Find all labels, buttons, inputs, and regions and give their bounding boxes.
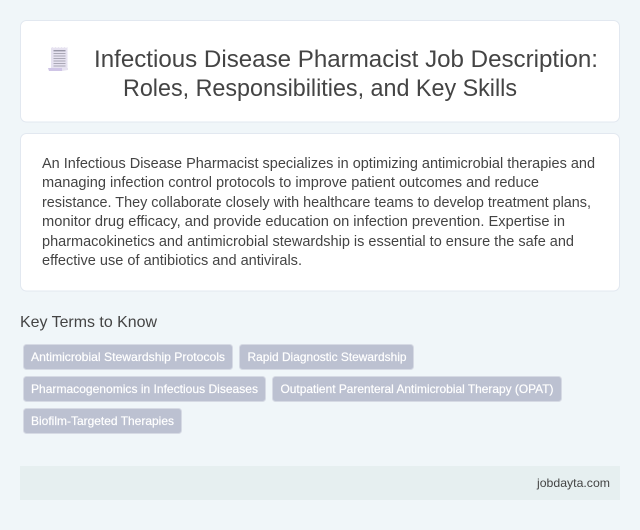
- tag: pharmacogenomics: [24, 376, 266, 402]
- tag: OPAT: Outpatient Parenteral Antimicrobial Therapy (OPAT): [280, 382, 554, 396]
- tag: pharmacogenomics: Pharmacogenomics in Infectious Diseases: [31, 382, 258, 396]
- description text: monitor drug efficacy, and provide education on infection prevention. Expertise in: [42, 214, 565, 230]
- tag: rapid diagnostic stewardship: Rapid Diagnostic Stewardship: [248, 350, 407, 364]
- description text: effective use of antibiotics and antivirals.: [42, 253, 302, 269]
- tag: biofilm: Biofilm-Targeted Therapies: [31, 414, 174, 428]
- footer source: jobdayta.com: [536, 476, 610, 490]
- title: Roles, Responsibilities, and Key Skills: [123, 75, 517, 102]
- tag: OPAT: [272, 376, 562, 402]
- title: [94, 46, 598, 102]
- tags: key terms: [24, 344, 562, 434]
- footer: [20, 466, 620, 500]
- description text: pharmacokinetics and antimicrobial stewardship is essential to ensure the safe and: [42, 234, 574, 250]
- tag: rapid diagnostic stewardship: [240, 344, 414, 370]
- description text: [42, 156, 595, 269]
- tag: biofilm: [24, 408, 182, 434]
- heading: key terms: Key Terms to Know: [20, 314, 157, 331]
- description text: resistance. They collaborate closely with healthcare teams to develop treatment plans,: [42, 195, 591, 211]
- icon: document scroll: [48, 47, 68, 71]
- panel: description: [20, 134, 620, 291]
- description text: An Infectious Disease Pharmacist specializes in optimizing antimicrobial therapies and: [42, 156, 595, 172]
- tag: antimicrobial stewardship protocols: [24, 344, 232, 370]
- description text: managing infection control protocols to improve patient outcomes and reduce: [42, 175, 539, 191]
- tag: antimicrobial stewardship protocols: Antimicrobial Stewardship Protocols: [31, 350, 225, 364]
- panel: header: [20, 20, 620, 122]
- title: Infectious Disease Pharmacist Job Description:: [94, 46, 598, 73]
